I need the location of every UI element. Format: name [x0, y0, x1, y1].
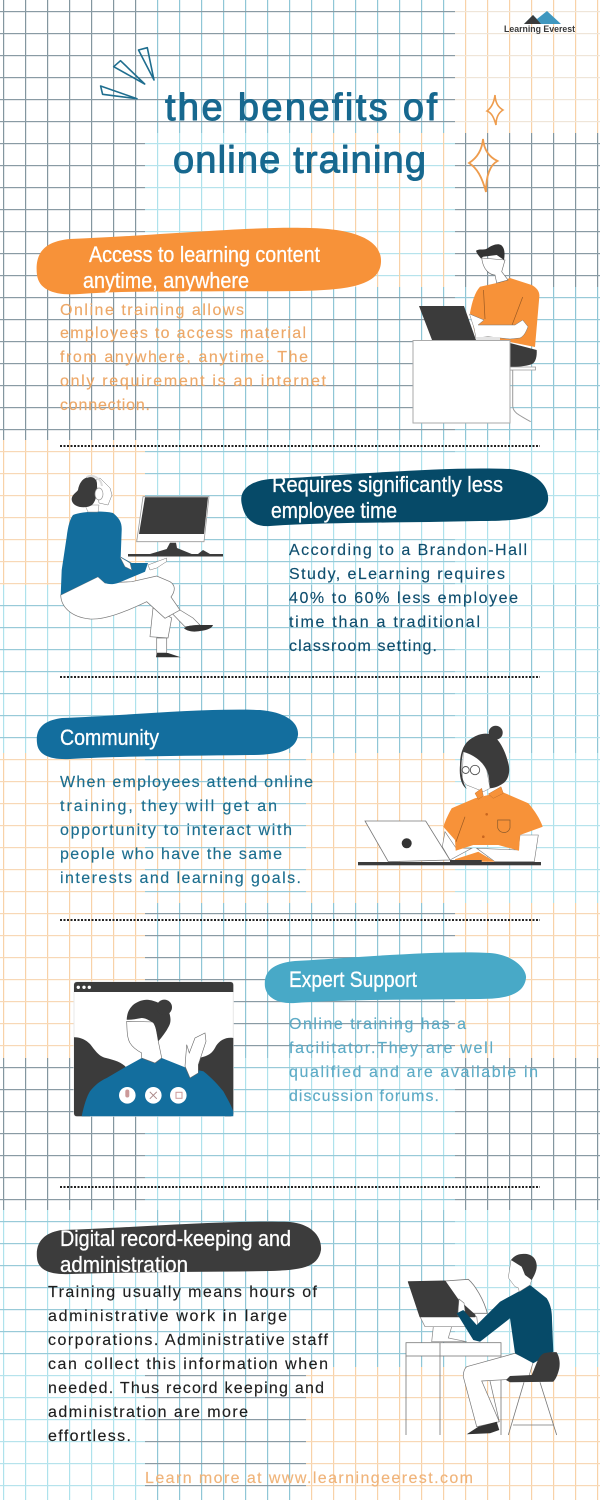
icon: burst spikes — [101, 48, 154, 99]
body text: employee time: time than a traditional — [289, 614, 480, 631]
panel: community — [37, 710, 543, 887]
heading pill: employee time: employee time — [271, 498, 397, 523]
divider 3 — [60, 919, 540, 921]
body text: community: people who have the same — [60, 846, 282, 863]
icon: large sparkle — [469, 139, 498, 192]
body text: expert support: facilitator.They are well — [289, 1040, 493, 1057]
heading pill: community — [37, 710, 298, 759]
heading pill: employee time: Requires significantly less — [272, 472, 503, 497]
body text: access: only requirement is an internet — [60, 373, 327, 390]
illustration: woman at desktop — [61, 476, 223, 657]
heading pill: community: Community — [60, 725, 159, 750]
illustration: video call window — [74, 982, 233, 1116]
body text: expert support: qualified and are available in — [289, 1064, 538, 1081]
panel: access anytime — [37, 228, 539, 423]
body text: access: from anywhere, anytime. The — [60, 349, 308, 366]
body text: record-keeping: needed. Thus record keeping and — [48, 1380, 324, 1397]
body text: employee time: 40% to 60% less employee — [289, 590, 518, 607]
body text: community: interests and learning goals. — [60, 870, 301, 887]
body text: access: employees to access material — [60, 325, 306, 342]
heading pill: access: anytime, anywhere — [83, 268, 249, 293]
body text: record-keeping: administrative work in large — [48, 1308, 287, 1325]
body text: record-keeping: effortless. — [48, 1428, 131, 1445]
illustration: man at computer on stool — [406, 1254, 560, 1435]
heading pill: access — [37, 228, 381, 294]
divider 4 — [60, 1186, 540, 1188]
body text: access — [60, 302, 327, 414]
body text: community: When employees attend online — [60, 774, 313, 791]
body text: employee time — [289, 542, 527, 655]
heading pill: expert support — [265, 952, 526, 1003]
panel: digital record-keeping — [37, 1222, 560, 1445]
title — [165, 87, 437, 182]
logo: Learning Everest: Learning Everest — [504, 24, 575, 34]
body text: record-keeping: Training usually means hours of — [48, 1284, 318, 1301]
heading pill: access: Access to learning content — [89, 242, 320, 267]
body text: community: training, they will get an — [60, 798, 277, 815]
heading pill: record-keeping: Digital record-keeping and — [60, 1226, 291, 1251]
panel: expert support — [74, 952, 538, 1116]
illustration: woman with glasses at laptop — [358, 726, 543, 865]
body text: record-keeping: administration are more — [48, 1404, 248, 1421]
body text: employee time: Study, eLearning requires — [289, 566, 505, 583]
body text: community — [60, 774, 313, 887]
title: online training — [173, 140, 426, 182]
body text: expert support: discussion forums. — [289, 1088, 439, 1105]
panel: less employee time — [61, 468, 548, 657]
heading pill: employee time — [241, 468, 548, 526]
body text: access: connection. — [60, 397, 150, 414]
body text: access: Online training allows — [60, 302, 244, 319]
body text: employee time: According to a Brandon-Hall — [289, 542, 527, 559]
body text: expert support: Online training has a — [289, 1016, 466, 1033]
footer link text: Learn more at www.learningeerest.com — [145, 1470, 473, 1487]
title: the benefits of — [165, 87, 437, 129]
divider 1 — [60, 445, 540, 447]
heading pill: record-keeping: administration — [60, 1252, 188, 1277]
body text: record-keeping: can collect this information when — [48, 1356, 328, 1373]
body text: record-keeping — [48, 1284, 329, 1445]
heading pill: record-keeping — [37, 1222, 321, 1277]
illustration: man at laptop — [413, 244, 539, 423]
icon: small sparkle — [487, 95, 503, 125]
divider 2 — [60, 676, 540, 678]
body text: community: opportunity to interact with — [60, 822, 292, 839]
logo: Learning Everest — [504, 11, 575, 34]
heading pill: expert support: Expert Support — [289, 967, 417, 992]
body text: record-keeping: corporations. Administrative staff — [48, 1332, 329, 1349]
body text: employee time: classroom setting. — [289, 638, 437, 655]
body text: expert support — [289, 1016, 538, 1105]
